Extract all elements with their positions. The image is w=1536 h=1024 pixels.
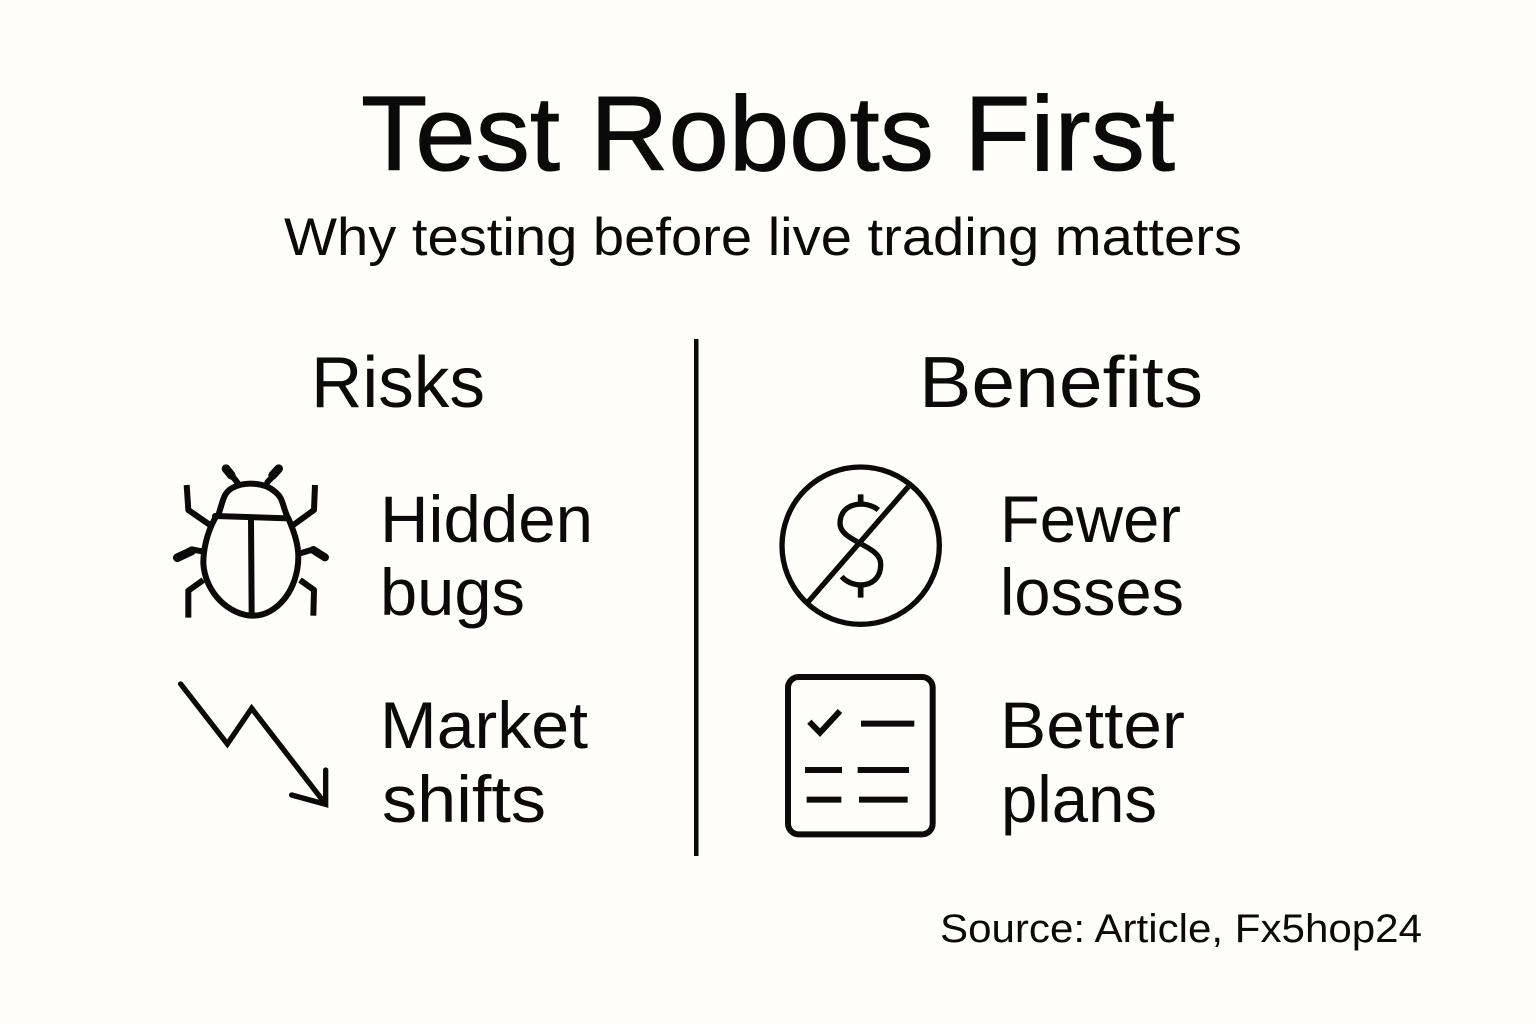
label: hidden bugs: Hidden	[380, 482, 593, 556]
panel: risks	[177, 343, 593, 836]
icon: falling arrow	[181, 684, 326, 804]
source note: Source: Article, Fx5hop24	[940, 907, 1422, 951]
label: fewer losses: Fewer	[1000, 482, 1181, 556]
label: market shifts: shifts	[382, 762, 546, 836]
label: fewer losses: losses	[1000, 555, 1184, 629]
label: market shifts: Market	[380, 688, 588, 762]
divider between columns	[694, 339, 698, 856]
panel: benefits	[782, 343, 1203, 836]
label: market shifts	[380, 688, 588, 836]
icon: checklist	[788, 677, 933, 834]
icon: bug	[177, 469, 325, 618]
heading: benefits: Benefits	[919, 343, 1203, 423]
icon: crossed dollar	[782, 467, 939, 624]
label: hidden bugs	[380, 482, 593, 629]
label: better plans: plans	[1001, 762, 1157, 836]
label: better plans: Better	[1000, 688, 1185, 762]
subtitle: Why testing before live trading matters	[284, 208, 1242, 267]
label: better plans	[1000, 688, 1185, 836]
label: hidden bugs: bugs	[380, 555, 525, 629]
title: Test Robots First	[361, 75, 1175, 193]
heading: risks: Risks	[311, 343, 485, 423]
label: fewer losses	[1000, 482, 1184, 629]
